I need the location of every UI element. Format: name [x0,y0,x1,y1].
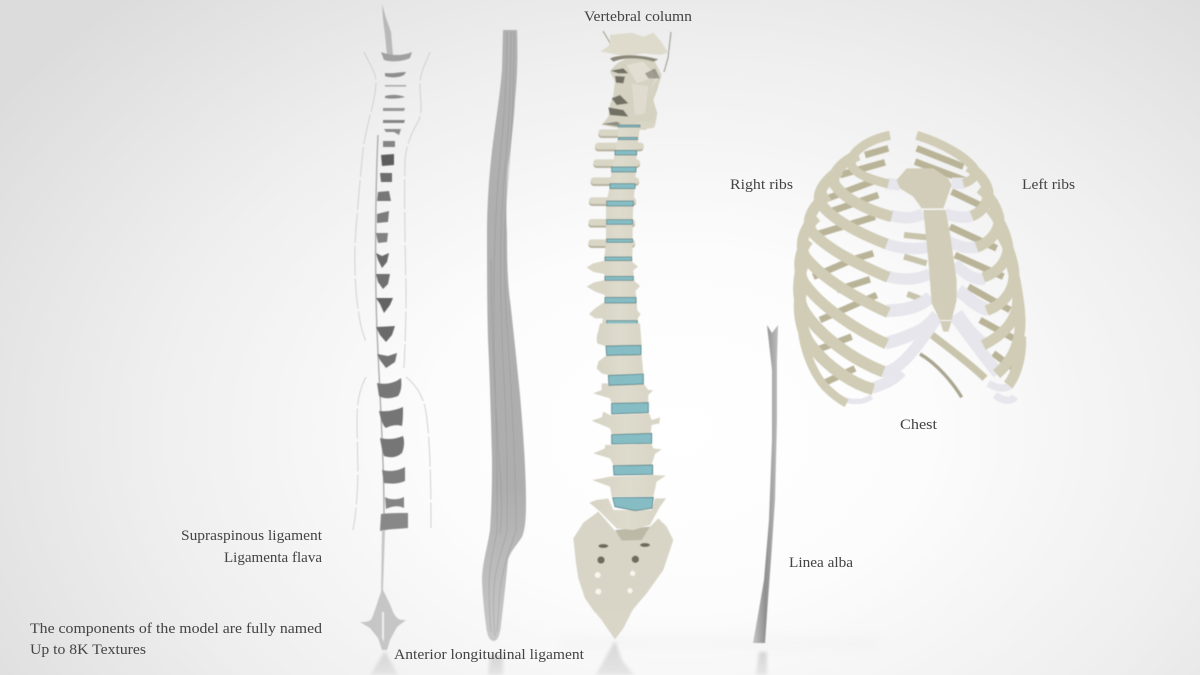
fish-tail end of ligament [360,530,406,650]
lower floating rib [930,333,985,378]
label: left ribs: Left ribs [1022,177,1075,193]
tail slit [382,612,384,642]
atlas shadow [610,55,658,62]
note: textures: Up to 8K Textures [30,642,146,658]
floor reflections [370,641,767,675]
label: supraspinous ligament: Supraspinous ligament [181,528,323,544]
lower thoracic processes [587,261,641,319]
process shadows [592,135,640,245]
manubrium [897,168,952,208]
label: chest: Chest [900,417,938,433]
sacral ala shadow [615,527,650,541]
linea alba [753,325,778,643]
coccyx [592,607,634,639]
thoracic processes [592,125,652,243]
label: anterior longitudinal ligament: Anterior longitudinal ligament [394,647,585,663]
back ribs [813,148,1013,383]
back rib ends near sternum [904,235,927,299]
rib cage [799,135,1021,403]
ligament centre line [376,135,384,515]
sacrum [573,512,673,613]
sacral foramina [595,543,650,595]
cervical light facets [627,62,660,90]
costal cartilages [837,183,1015,401]
anterior longitudinal ligament [482,30,526,641]
cervical guide lines [603,31,671,72]
supraspinous ligament and ligamenta flava [353,4,431,650]
label: right ribs: Right ribs [730,177,793,193]
note: components named: The components of the model are fully named [30,621,323,637]
lumbar vertebrae [589,323,666,530]
label: linea alba: Linea alba [789,555,853,571]
thoracic vertebral bodies [597,124,640,343]
sternal body [923,210,957,320]
floor contact shadow [560,640,880,646]
xiphoid process [940,321,952,332]
ligament fibres [489,32,516,636]
cervical dark gaps [602,68,660,128]
bony ribs, body left [799,135,892,403]
lumbar and sacral section [573,323,673,639]
dashed outline: supraspinous ligament [353,52,431,530]
thoracic discs [605,125,640,327]
label: vertebral column: Vertebral column [584,9,693,25]
bony ribs, body right [917,135,1021,385]
lowest rib [920,354,962,397]
atlas vertebra [600,33,668,57]
label: ligamenta flava: Ligamenta flava [224,550,322,566]
sternum [897,168,957,332]
thoracic and cervical section [587,33,668,343]
lumbar discs [606,345,653,511]
cervical block [602,57,662,130]
top strip [382,4,393,55]
vertebral column [573,31,673,639]
ligament segments [376,52,412,531]
